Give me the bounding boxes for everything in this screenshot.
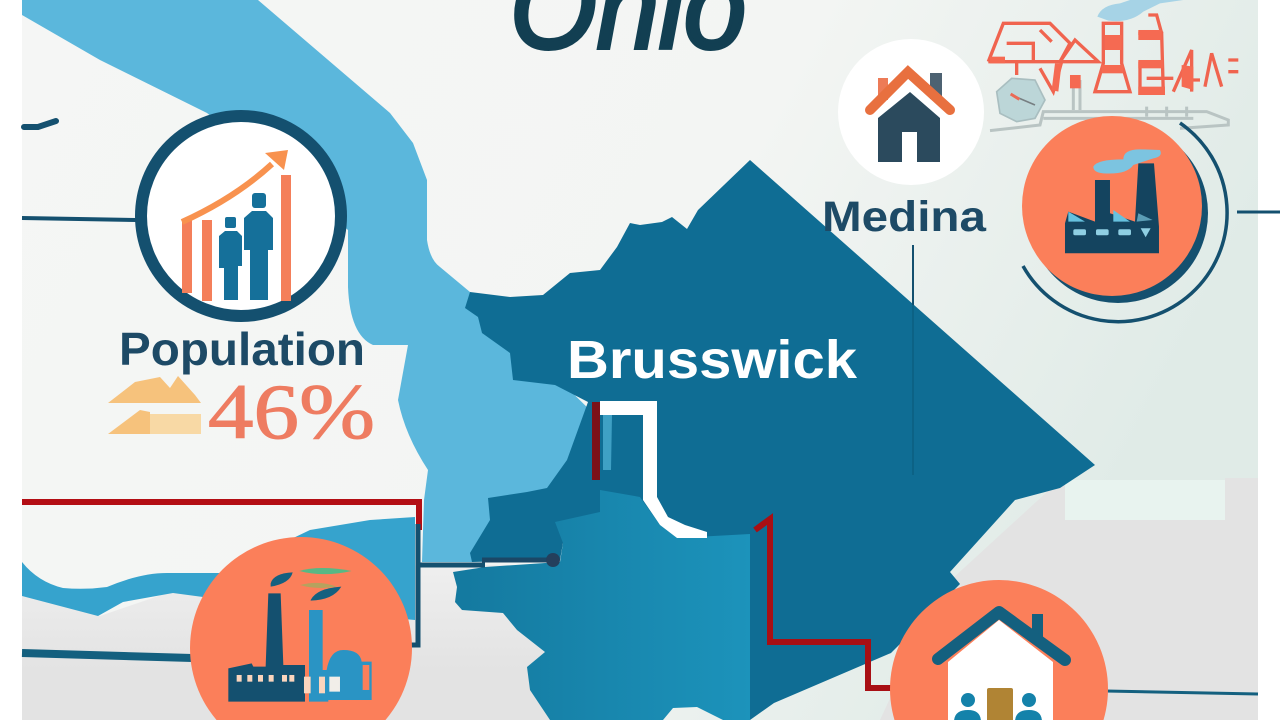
red fills [990, 30, 1193, 95]
region: southern lobe [453, 490, 750, 720]
region: main county [465, 160, 1095, 720]
windows [237, 675, 340, 693]
statistic: 46%: 46% [208, 368, 375, 455]
white boundary line [600, 401, 707, 538]
chimney [930, 73, 942, 99]
icon: power plant badge [190, 537, 412, 720]
connector: factory [1237, 210, 1280, 214]
house body [878, 92, 940, 162]
label: Population: Population [119, 323, 365, 375]
house body [948, 620, 1053, 720]
icon: population growth [141, 116, 341, 316]
connector: lower left [22, 653, 192, 658]
bars [182, 175, 291, 301]
red linework [988, 15, 1238, 93]
icon: house [838, 39, 984, 185]
decorative mini chart [108, 376, 201, 434]
connector: lower right [1106, 691, 1258, 694]
map: Ohio county regions [453, 160, 1095, 720]
red factory sketch [988, 0, 1238, 131]
growth arrow [182, 150, 288, 222]
connector: Medina inside map [912, 305, 914, 475]
crescent shadow [1028, 123, 1208, 303]
channel highlight [603, 415, 612, 470]
chimney left [878, 78, 888, 100]
smoke [1097, 0, 1183, 21]
people [219, 193, 273, 300]
connector: dark line to dot [482, 558, 553, 562]
dark red boundary line [592, 402, 600, 480]
thin ring arc [1023, 123, 1227, 322]
connector: dark blue bracket [410, 524, 485, 645]
roof [1032, 614, 1043, 636]
connector dot [546, 553, 560, 567]
smoke [271, 572, 293, 587]
stream [22, 517, 415, 620]
roof [870, 72, 950, 110]
river [22, 0, 600, 562]
icon: housing badge [890, 580, 1108, 720]
connector: red frame [22, 502, 419, 530]
connector: Medina [912, 245, 914, 305]
grey base [990, 78, 1228, 131]
coral disc [1022, 116, 1202, 296]
icon: factory badge [1022, 116, 1227, 322]
door [987, 688, 1013, 720]
connector: population [22, 218, 136, 220]
connector: red arrow route [755, 519, 892, 688]
small stroke mark [24, 121, 56, 127]
factory glyph [1065, 149, 1161, 253]
label: Brusswick: Brusswick [567, 330, 858, 390]
people [954, 693, 1042, 720]
chimneys and building [228, 593, 305, 702]
label: Medina: Medina [822, 193, 987, 241]
